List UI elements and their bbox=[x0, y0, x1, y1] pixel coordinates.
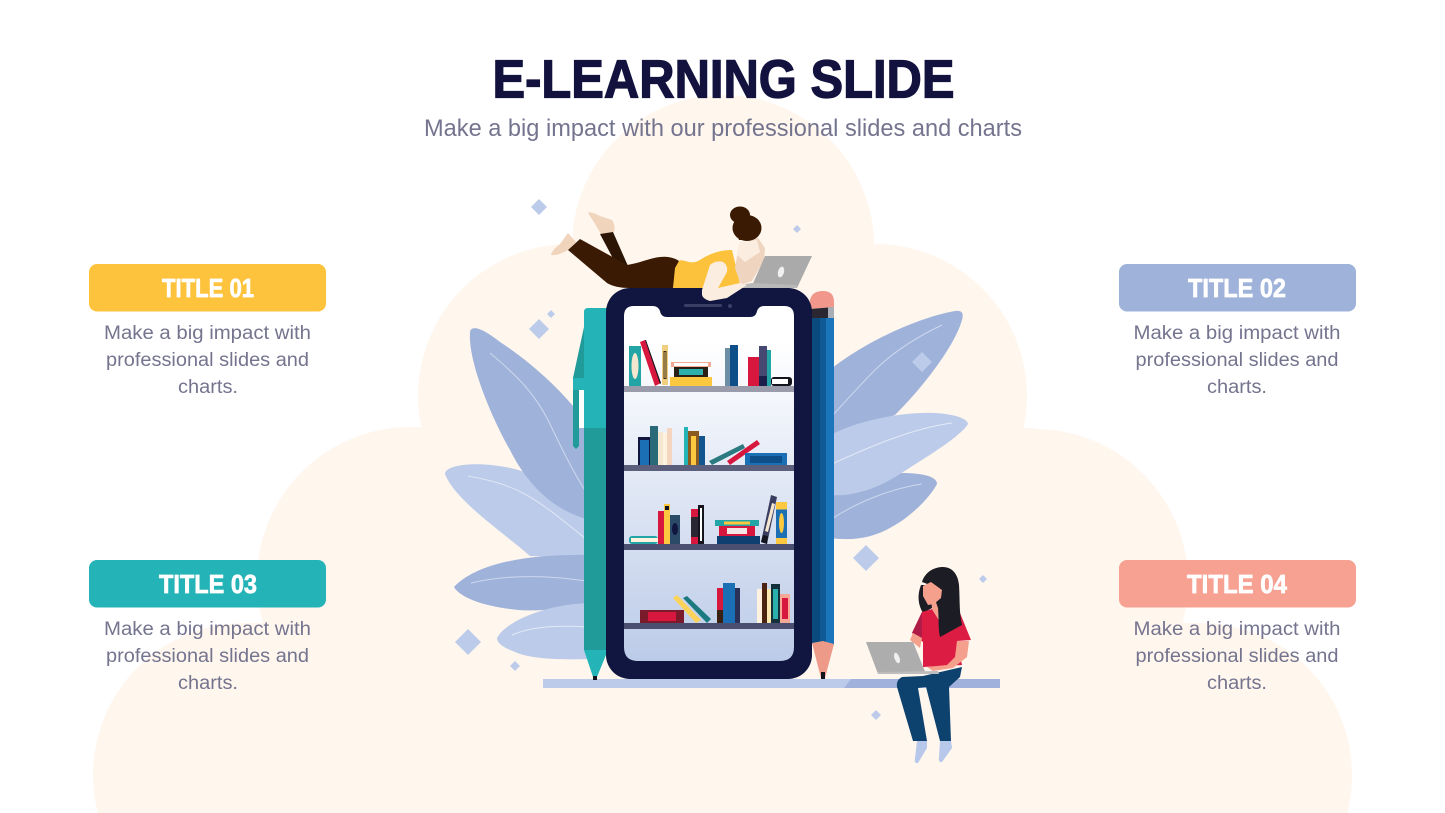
neck bbox=[932, 600, 942, 622]
books: shelf 2 bbox=[638, 426, 787, 465]
heading: TITLE 03 bbox=[159, 569, 257, 599]
hair bbox=[730, 206, 762, 241]
books: shelf 1 bbox=[629, 340, 792, 386]
body text: Make a big impact with bbox=[1134, 619, 1340, 640]
body text: Make a big impact with bbox=[104, 619, 311, 640]
left hand bbox=[910, 633, 922, 648]
panel: title 02 bbox=[1119, 264, 1356, 398]
illustration: woman sitting with laptop bbox=[866, 567, 971, 763]
phone body bbox=[606, 288, 812, 679]
shirt bbox=[912, 609, 971, 667]
shelves bbox=[624, 386, 794, 629]
body text: Make a big impact with bbox=[1134, 323, 1340, 344]
illustration: woman lying on phone bbox=[551, 206, 812, 301]
heading badge bbox=[1119, 560, 1356, 608]
back leg bbox=[600, 232, 628, 266]
books: shelf 4 bbox=[640, 583, 790, 623]
back foot bbox=[588, 212, 615, 234]
heading: TITLE 01 bbox=[162, 273, 254, 303]
hair bbox=[922, 567, 962, 637]
socks bbox=[915, 741, 927, 763]
body text bbox=[1134, 619, 1340, 694]
body text: professional slides and bbox=[106, 350, 309, 371]
heading: TITLE 04 bbox=[1187, 569, 1287, 599]
face bbox=[923, 582, 942, 605]
face and arm bbox=[735, 238, 765, 285]
phone screen bbox=[624, 306, 794, 661]
sleeve shade bbox=[912, 612, 922, 638]
books: shelf 3 bbox=[629, 495, 787, 544]
decorative diamonds bbox=[455, 199, 987, 720]
speaker bbox=[684, 304, 722, 307]
cloud background bbox=[93, 95, 1352, 813]
panel: title 01 bbox=[89, 264, 326, 398]
subtitle: Make a big impact with our professional slides and charts bbox=[424, 115, 1022, 142]
icon: left leaves bbox=[445, 328, 590, 659]
heading: TITLE 02 bbox=[1188, 273, 1286, 303]
body text: professional slides and bbox=[106, 646, 309, 667]
body text bbox=[104, 323, 311, 398]
phone bbox=[606, 288, 812, 679]
panel: title 04 bbox=[1119, 560, 1356, 694]
laptop bbox=[740, 256, 812, 288]
body text: charts. bbox=[1207, 377, 1267, 398]
pants bbox=[568, 239, 679, 288]
body text: charts. bbox=[1207, 673, 1267, 694]
body text: professional slides and bbox=[1136, 350, 1338, 371]
icon: pencil bbox=[810, 291, 834, 679]
laptop bbox=[866, 642, 939, 674]
body text: charts. bbox=[178, 673, 238, 694]
body text: Make a big impact with bbox=[104, 323, 311, 344]
icon: right leaves bbox=[830, 311, 968, 539]
icon: pen bbox=[573, 308, 608, 680]
body text: charts. bbox=[178, 377, 238, 398]
yellow top bbox=[673, 250, 741, 288]
back hair bbox=[919, 585, 932, 613]
title: E-LEARNING SLIDE bbox=[492, 50, 954, 110]
heading badge bbox=[89, 560, 326, 608]
front foot bbox=[551, 233, 576, 255]
heading badge bbox=[89, 264, 326, 312]
panel: title 03 bbox=[89, 560, 326, 694]
body text bbox=[1134, 323, 1340, 398]
pants bbox=[897, 667, 962, 741]
body text: professional slides and bbox=[1136, 646, 1338, 667]
arm bbox=[702, 261, 747, 301]
ground bar bbox=[543, 679, 1000, 688]
body text bbox=[104, 619, 311, 694]
arm bbox=[927, 641, 969, 671]
heading badge bbox=[1119, 264, 1356, 312]
